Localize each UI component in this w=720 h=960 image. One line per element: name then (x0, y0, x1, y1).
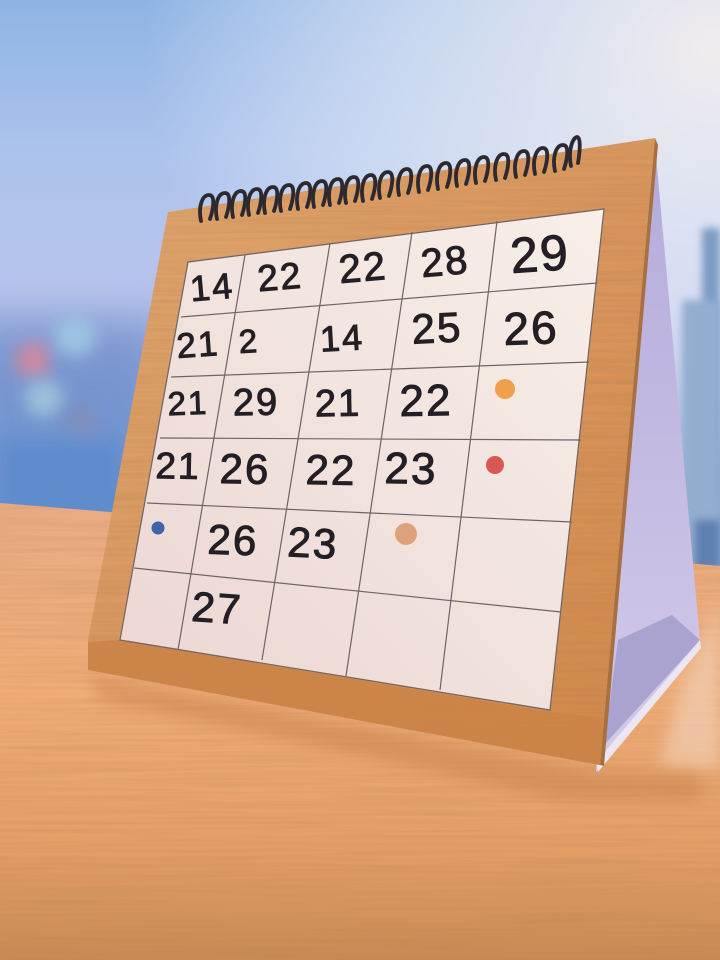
calendar dates: 27 (190, 583, 244, 633)
calendar dates: 14 (188, 265, 236, 309)
calendar paper grid (120, 209, 604, 710)
background: blurred city (0, 228, 720, 570)
table surface (0, 500, 720, 960)
calendar dates: 22 (256, 255, 304, 299)
calendar dates: 14 (319, 316, 365, 360)
calendar dates: 29 (232, 382, 280, 424)
calendar dates: 23 (286, 518, 340, 568)
calendar dates: 21 (167, 384, 209, 422)
spiral binding (200, 137, 580, 221)
calendar dates: 23 (384, 444, 438, 494)
calendar dates: 21 (175, 324, 221, 366)
calendar dates: 25 (410, 303, 464, 353)
calendar dates: 26 (503, 301, 559, 355)
calendar dates: 29 (508, 224, 572, 284)
calendar wooden board (88, 138, 658, 766)
calendar dates: 28 (419, 238, 471, 286)
calendar dates: 22 (305, 446, 357, 494)
calendar dates: 22 (337, 244, 389, 292)
calendar back stand (596, 145, 701, 772)
calendar dates: 26 (219, 445, 271, 493)
calendar dates (155, 224, 572, 633)
calendar dates: 26 (207, 516, 259, 564)
calendar dates: 21 (314, 383, 362, 425)
calendar dates: 21 (155, 445, 201, 487)
calendar dates: 22 (399, 376, 453, 426)
event markers (152, 379, 515, 545)
background: blurred sky (0, 0, 720, 600)
calendar dates: 2 (238, 322, 260, 360)
